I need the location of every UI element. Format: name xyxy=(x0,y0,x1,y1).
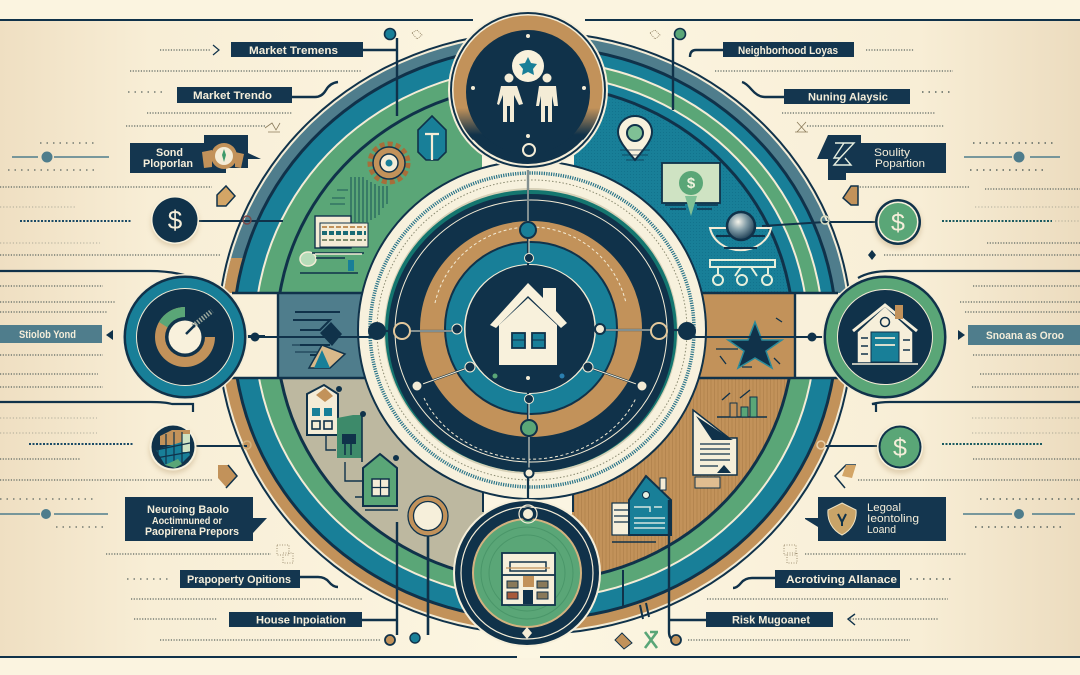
icon: star xyxy=(716,318,782,368)
label: neighborhood loyas: Neighborhood Loyas xyxy=(738,45,838,57)
label: nuning alaysic xyxy=(784,89,910,104)
icon: money card: $ xyxy=(687,175,696,192)
dotted text lines left xyxy=(0,50,380,640)
label: market trendo: Market Trendo xyxy=(193,90,272,102)
label: house inpoiation xyxy=(229,612,362,627)
label: acrotiving allanace: Acrotiving Allanace xyxy=(786,574,897,586)
panel: central ring xyxy=(357,160,707,500)
panel: bottom right outer bands xyxy=(570,379,848,634)
label: neighborhood loyas xyxy=(723,42,854,57)
icon: document xyxy=(693,410,737,488)
label: sond ploporlan xyxy=(130,135,261,173)
icon: arrow shield xyxy=(418,116,446,160)
panel: bottom left outer bands xyxy=(222,379,484,630)
icon: blue house and note xyxy=(612,476,671,542)
icon: gear xyxy=(370,144,408,182)
icon: house one xyxy=(307,385,342,435)
icon: bar chart xyxy=(717,390,767,417)
label: nuning alaysic: Nuning Alaysic xyxy=(808,92,888,104)
label: risk mugoanet xyxy=(706,612,833,627)
label: legoal leontoling loand: Loand xyxy=(867,524,896,536)
cream gaps top and bottom of sectors xyxy=(482,130,574,514)
icon: bottom green cross xyxy=(645,632,658,648)
icon: shield xyxy=(828,503,856,535)
center spokes xyxy=(377,150,687,500)
label: stiolob yond xyxy=(0,325,102,343)
icon: dollar badge top right xyxy=(874,199,922,249)
label: soulity popartion: Popartion xyxy=(875,158,925,170)
label: stiolob yond: Stiolob Yond xyxy=(19,329,76,341)
spoke nodes xyxy=(369,222,695,478)
panel: right circle house xyxy=(687,222,948,446)
vertical connector lines xyxy=(292,38,784,640)
label: acrotiving allanace xyxy=(775,570,900,588)
label: market tremens: Market Tremens xyxy=(249,45,338,57)
connector rings xyxy=(243,216,829,449)
dotted text lines right xyxy=(688,50,1080,640)
panel: top left outer bands xyxy=(221,38,482,293)
connector dots xyxy=(384,28,686,645)
panel: top right outer bands xyxy=(574,34,849,293)
small doodles xyxy=(265,30,808,563)
label: soulity popartion: Soulity xyxy=(874,147,911,159)
icon: dollar badge top left xyxy=(151,196,199,247)
center dots xyxy=(492,374,564,380)
icon: watch badge xyxy=(202,143,244,169)
label: prapoperty opitions: Prapoperty Opitions xyxy=(187,574,291,586)
label: prapoperty opitions xyxy=(180,570,300,588)
label: sond ploporlan: Sond xyxy=(156,147,183,159)
label: market tremens xyxy=(231,42,363,57)
stripe ring xyxy=(370,173,694,487)
small tan tags xyxy=(217,186,858,488)
icon: dollar badge bottom right: $ xyxy=(893,434,907,462)
icon: central house xyxy=(490,283,567,365)
icon: buildings badge bottom left xyxy=(149,424,197,474)
panel: top circle xyxy=(448,10,608,170)
icon: house two xyxy=(326,411,366,481)
label: sond ploporlan: Ploporlan xyxy=(143,158,193,170)
icon: right circle house xyxy=(852,305,918,364)
label: neuroing baolo: Aoctimnuned or xyxy=(152,516,222,527)
label: neuroing baolo: Neuroing Baolo xyxy=(147,504,229,516)
label: market trendo xyxy=(177,87,292,103)
label: snoana as oroo xyxy=(968,325,1080,345)
label: soulity popartion xyxy=(817,135,946,180)
icon: money card xyxy=(662,163,720,216)
icon: building xyxy=(502,553,555,605)
panel: left circle gauge xyxy=(122,221,377,446)
icon: dollar badge bottom right xyxy=(876,424,924,474)
small arrowheads xyxy=(106,250,965,340)
icon: map pin xyxy=(618,116,652,160)
icon: hourglass xyxy=(834,143,854,165)
icon: bottom tan kite xyxy=(615,633,632,649)
label: neuroing baolo xyxy=(125,497,267,541)
icon: tag with bars xyxy=(300,252,364,273)
hatching xyxy=(330,177,387,222)
icon: glass ball and bowl xyxy=(710,212,771,250)
icon: two people xyxy=(497,74,558,122)
label: snoana as oroo: Snoana as Oroo xyxy=(986,330,1064,342)
label: legoal leontoling loand: Ieontoling xyxy=(867,513,919,525)
label: legoal leontoling loand: Legoal xyxy=(867,502,901,514)
chevrons and arrows xyxy=(213,45,855,625)
icon: rack with rings xyxy=(710,260,775,285)
label: legoal leontoling loand xyxy=(805,497,946,541)
icon: star badge xyxy=(512,50,544,82)
icon: magnifier with stem xyxy=(408,496,448,635)
panel: middle sectors xyxy=(232,293,838,378)
label: house inpoiation: House Inpoiation xyxy=(256,614,346,626)
label: risk mugoanet: Risk Mugoanet xyxy=(732,614,810,626)
label: neuroing baolo: Paopirena Prepors xyxy=(145,526,239,538)
icon: dollar badge top left: $ xyxy=(168,205,183,235)
dots xyxy=(471,34,586,138)
icon: house three xyxy=(355,454,399,510)
icon: data table panel xyxy=(315,216,368,248)
icon: dollar badge top right: $ xyxy=(891,209,905,237)
icon: striped fan xyxy=(292,312,345,368)
tan band segment xyxy=(224,258,242,293)
panel: bottom circle xyxy=(453,499,601,647)
slider markers xyxy=(0,152,1075,518)
